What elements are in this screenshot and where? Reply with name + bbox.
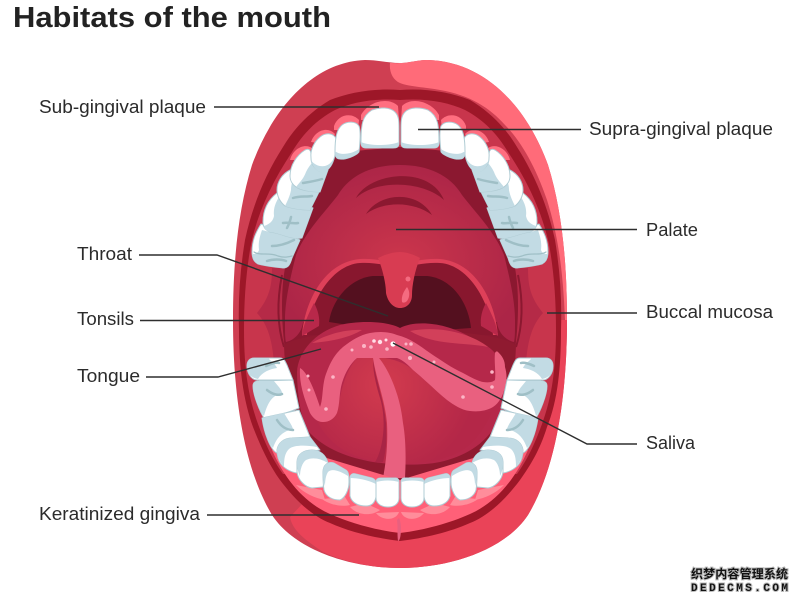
upper teeth, left: [252, 108, 399, 268]
tongue highlights: [312, 329, 488, 347]
second molar: [253, 380, 299, 418]
label: Buccal mucosa: Buccal mucosa: [646, 302, 774, 322]
label: Keratinized gingiva: Keratinized gingiva: [39, 504, 201, 524]
tongue underside ribbon: [300, 332, 506, 422]
central incisor: [376, 478, 399, 507]
label: Tongue: Tongue: [77, 366, 140, 386]
lateral incisor: [350, 474, 376, 506]
lateral incisor: [335, 122, 360, 159]
first molar: [262, 410, 310, 453]
throat arches: [302, 259, 498, 335]
label: Throat: [77, 244, 388, 316]
label: Palate: Palate: [646, 220, 698, 240]
label: Tonsils: Tonsils: [77, 309, 134, 329]
watermark: [691, 565, 788, 595]
buccal mucosa folds, right: [508, 268, 543, 362]
first premolar: [297, 450, 328, 488]
upper gum bumps, left: [290, 101, 399, 160]
watermark: 织梦内容管理系统: [691, 565, 788, 582]
second premolar: [277, 437, 320, 473]
mouth opening dark band: [239, 89, 561, 541]
buccal mucosa folds, left: [257, 268, 292, 362]
palate: [282, 147, 518, 350]
floor of the mouth: [284, 330, 516, 485]
upper gum bumps, right: [401, 101, 510, 160]
second molar: [263, 193, 313, 238]
palate ridges: [356, 176, 444, 215]
third molar: [247, 358, 293, 380]
lower gum: [272, 450, 528, 541]
lower teeth, right: [401, 358, 553, 507]
central incisor: [361, 108, 399, 148]
canine: [323, 462, 349, 500]
lower teeth, left: [247, 358, 399, 507]
tonsil, left: [302, 303, 319, 336]
illustration: open mouth: [233, 60, 567, 568]
label: Tongue: [77, 349, 321, 386]
label: Throat: Throat: [77, 244, 132, 264]
label: Saliva: Saliva: [646, 433, 696, 453]
label: Saliva: [393, 343, 696, 453]
canine: [311, 134, 336, 172]
lips: [233, 60, 567, 568]
upper teeth, right: [401, 108, 548, 268]
back molar: [252, 224, 300, 268]
watermark: DEDECMS.COM: [691, 583, 788, 595]
premolar: [290, 149, 328, 192]
inner cheeks and upper gum: [244, 99, 556, 474]
first molar: [277, 170, 320, 210]
tonsil, right: [481, 303, 498, 336]
tongue: [297, 322, 507, 478]
uvula: [378, 252, 420, 308]
label: Sub-gingival plaque: Sub-gingival plaque: [39, 97, 206, 117]
title: Habitats of the mouth: [13, 2, 331, 34]
label: Supra-gingival plaque: Supra-gingival plaque: [589, 119, 773, 139]
saliva droplets: [306, 338, 494, 411]
frenulum: [373, 358, 406, 478]
